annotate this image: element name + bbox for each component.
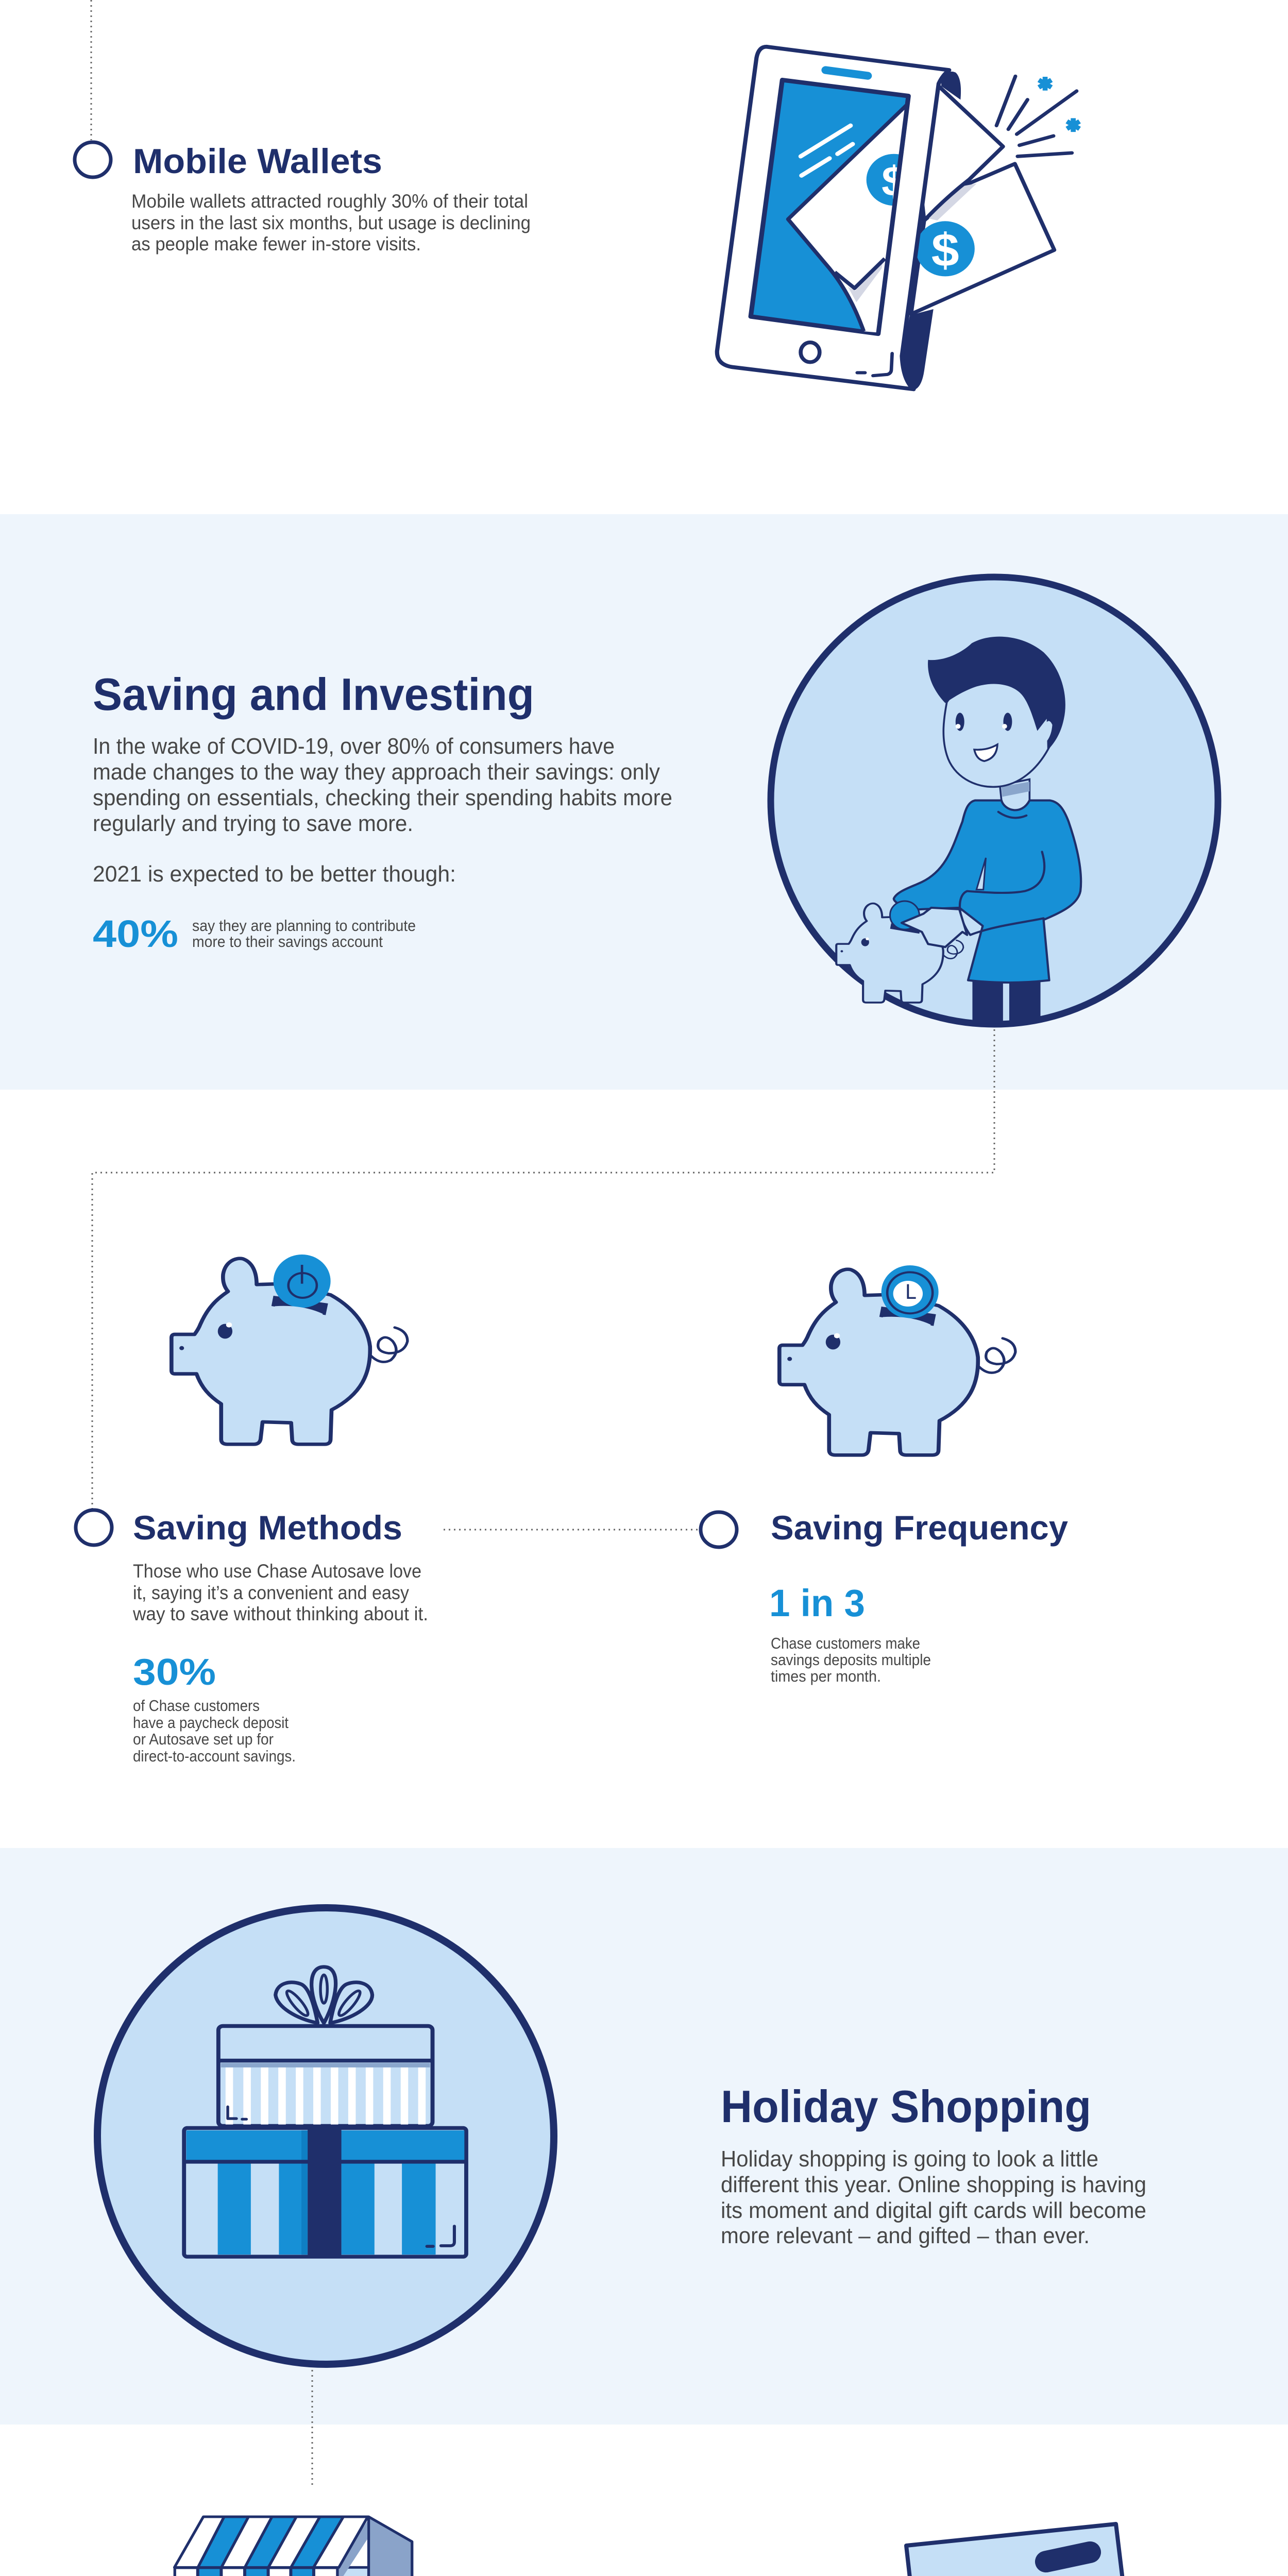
marker: saving frequency [701, 1512, 737, 1547]
heading: saving and investing: Saving and Investing [93, 669, 534, 720]
stat: 1 in 3: 1 in 3 [769, 1582, 865, 1624]
text block: frequency description: Chase customers make [771, 1634, 920, 1652]
icon: piggy bank with clock coin [779, 1265, 1015, 1455]
text block: 30% description: of Chase customers [133, 1697, 260, 1715]
section: saving frequency [769, 1509, 1068, 1685]
figure: face [928, 637, 1065, 787]
figure: hand [902, 908, 967, 947]
connector: holiday to stores [311, 2370, 313, 2485]
store part: walls [204, 2517, 412, 2576]
connector: top dotted line [91, 0, 92, 140]
icon part: phone screen: $ [882, 158, 906, 205]
icon: storefront [175, 2517, 412, 2576]
text block: 30% description: direct-to-account savings. [133, 1747, 296, 1765]
text block: holiday shopping description: Holiday shopping is going to look a little [721, 2146, 1098, 2172]
text block: holiday shopping description: its moment and digital gift cards will become [721, 2198, 1146, 2223]
icon part: phone screen [751, 80, 922, 334]
icon part: phone body [717, 47, 949, 389]
connector: methods to frequency [444, 1529, 699, 1530]
icon part: upper bill [919, 86, 1003, 221]
icon part: phone curl [902, 72, 961, 390]
text block: frequency description [771, 1634, 931, 1685]
illustration: man with piggy bank [771, 577, 1218, 1024]
marker: saving methods [76, 1510, 112, 1545]
panel: holiday shopping [0, 1848, 1288, 2425]
text block: saving intro: spending on essentials, checking their spending habits more [93, 785, 672, 810]
heading: holiday shopping: Holiday Shopping [721, 2081, 1091, 2132]
text block: mobile wallets description [131, 191, 531, 255]
text block: 30% description: or Autosave set up for [133, 1730, 274, 1748]
section: mobile wallets text [131, 142, 531, 255]
text block: saving methods description: Those who use Chase Autosave love [133, 1561, 421, 1582]
store part: awning [175, 2517, 368, 2576]
text block: mobile wallets description: Mobile wallets attracted roughly 30% of their total [131, 191, 528, 212]
stat: 40% savings: say they are planning to contribute [192, 917, 416, 935]
figure: small piggy bank [836, 904, 963, 1003]
text block: saving methods description: way to save without thinking about it. [132, 1603, 428, 1624]
marker: mobile wallets [75, 142, 111, 177]
text block: saving intro [93, 734, 672, 887]
icon part: lower bill: $ [931, 224, 959, 276]
gift part: bow [276, 1967, 372, 2023]
heading: mobile wallets: Mobile Wallets [133, 142, 382, 181]
text block: mobile wallets description: as people make fewer in-store visits. [131, 233, 421, 255]
text block: saving intro: 2021 is expected to be better though: [93, 861, 456, 887]
text block: mobile wallets description: users in the last six months, but usage is declining [131, 212, 531, 233]
icon part: sparkle burst [996, 76, 1079, 156]
illustration: gift boxes [97, 1908, 554, 2364]
text block: frequency description: savings deposits multiple [771, 1651, 931, 1669]
text block: frequency description: times per month. [771, 1667, 881, 1685]
gift part: lower box [184, 2128, 466, 2257]
stat: 40% savings [93, 912, 416, 955]
icon: phone with money [717, 47, 1079, 390]
stat: 30% autosave: 30% [133, 1652, 216, 1693]
icon part: home button [801, 343, 892, 376]
text block: 30% description: have a paycheck deposit [133, 1714, 289, 1732]
figure: coin [890, 901, 919, 929]
connector: saving to methods [92, 1029, 994, 1510]
stat: 40% savings: 40% [93, 912, 178, 955]
text block: holiday shopping description: more relevant – and gifted – than ever. [721, 2223, 1090, 2248]
figure: legs [972, 979, 1041, 1024]
text block: saving intro: regularly and trying to save more. [93, 811, 413, 836]
stat: 40% savings: more to their savings account [192, 933, 383, 951]
text block: saving methods description: it, saying it’s a convenient and easy [133, 1582, 409, 1603]
panel: saving and investing [0, 514, 1288, 1090]
gift part: upper box [218, 2026, 433, 2126]
section: saving methods [132, 1509, 428, 1765]
text block: holiday shopping description: different this year. Online shopping is having [721, 2172, 1146, 2197]
heading: saving frequency: Saving Frequency [771, 1509, 1068, 1547]
icon: gift card [906, 2524, 1132, 2576]
icon part: phone speaker [826, 70, 868, 76]
text block: 30% description [133, 1697, 296, 1765]
figure: neck [1000, 779, 1029, 812]
text block: saving methods description [132, 1561, 428, 1624]
text block: holiday shopping description [721, 2146, 1146, 2248]
text block: saving intro: made changes to the way they approach their savings: only [93, 759, 660, 785]
icon part: lower bill [911, 164, 1054, 314]
text block: saving intro: In the wake of COVID-19, over 80% of consumers have [93, 734, 615, 759]
figure: sweater [894, 801, 1081, 982]
heading: saving methods: Saving Methods [133, 1509, 402, 1547]
icon: piggy bank with power coin [172, 1255, 408, 1444]
